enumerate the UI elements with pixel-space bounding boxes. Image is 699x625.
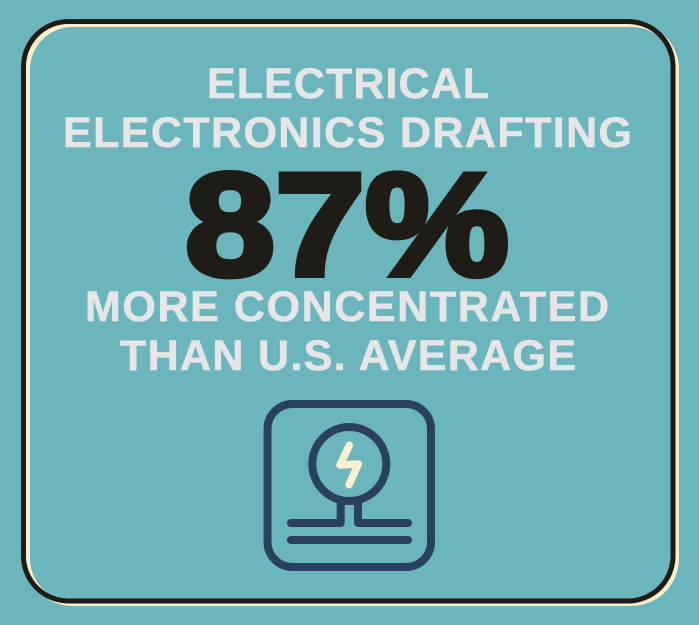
statistic: 87 percent: 87% — [185, 143, 509, 306]
text block: concentration description: THAN U.S. AVERAGE — [120, 332, 576, 380]
text block: concentration description — [85, 283, 609, 380]
icon: lightning bolt — [340, 445, 358, 485]
icon: electrical circuit with lightning bolt — [268, 404, 431, 567]
heading: occupation name: ELECTRONICS DRAFTING — [63, 109, 632, 157]
heading: occupation name: ELECTRICAL — [207, 60, 489, 108]
text block: concentration description: MORE CONCENTRATED — [85, 283, 609, 331]
heading: occupation name — [63, 60, 632, 157]
